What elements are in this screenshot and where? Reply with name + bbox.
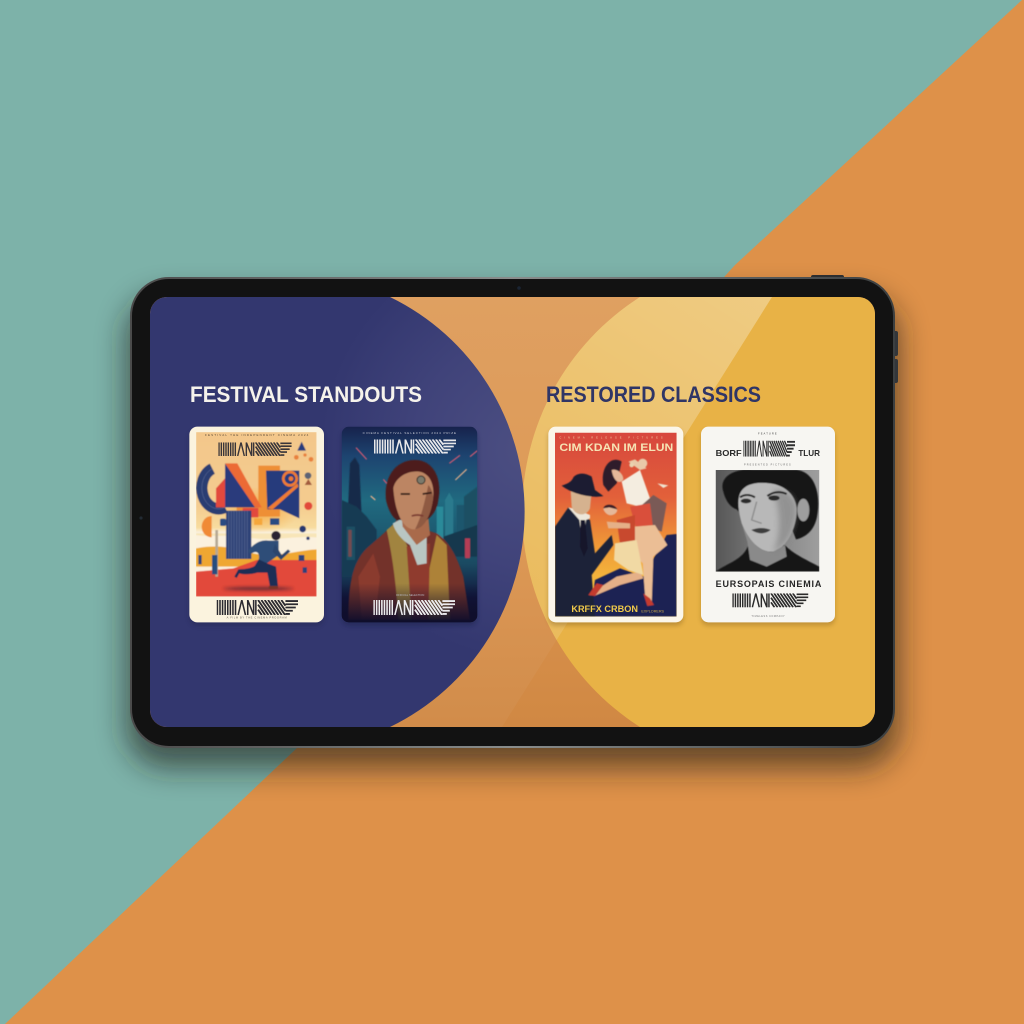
neck [402, 517, 430, 545]
dancing woman [603, 460, 622, 492]
yellow panel highlight [524, 297, 772, 640]
meteors [356, 448, 477, 483]
poster 2 small bottom text: OFFICIAL SELECTION [396, 593, 424, 597]
man in suit [555, 507, 613, 617]
front camera [517, 286, 521, 290]
left navy panel [150, 297, 525, 727]
poster 4 stripes logo top [744, 441, 795, 457]
poster 4 title left: BORF [716, 448, 742, 458]
orange glass highlight [380, 297, 772, 727]
poster 4 small subtitle: PRESENTED PICTURES [744, 463, 791, 466]
poster card 2: woman and skyline [342, 427, 477, 626]
runner figure [234, 531, 290, 589]
poster 4 main caption: EURSOPAIS CINEMIA [716, 579, 822, 589]
heading: festival standouts: FESTIVAL STANDOUTS [190, 382, 422, 407]
poster 2 stripes logo bottom [374, 600, 455, 615]
eyes and mouth [401, 493, 432, 494]
poster card 1: geometric runner [189, 427, 324, 626]
poster 3 title: CIM KDAN IM ELUN [559, 442, 673, 454]
side sensor [139, 516, 143, 520]
small partner figure [603, 505, 617, 515]
poster 2 stripes logo top [375, 439, 456, 454]
face [393, 471, 433, 529]
face shadow [415, 485, 433, 529]
scarf [393, 519, 427, 565]
poster card 3: vintage red poster [548, 427, 683, 626]
navy ground [590, 534, 677, 617]
tablet body [131, 278, 894, 747]
forehead jewel [417, 476, 425, 484]
poster 1 stripes logo top [219, 442, 292, 456]
poster 1 small bottom text: A FILM BY THE CINEMA PROGRAM [227, 616, 287, 620]
heading: restored classics: RESTORED CLASSICS [546, 382, 761, 407]
poster 1 small top text: FESTIVAL THE INDEPENDENT CINEMA 2024 [205, 433, 309, 437]
poster 4 portrait photo [716, 470, 819, 572]
middle orange background [150, 297, 875, 727]
top power button [811, 275, 844, 281]
screen [150, 297, 875, 727]
poster 4 stripes logo bottom [733, 593, 808, 607]
poster 3 small credit: EXPLORERS [641, 609, 665, 613]
right yellow panel [522, 297, 875, 727]
poster 2 small top text: CINEMA FESTIVAL SELECTION 2024 PRIZE [363, 431, 456, 435]
hair [386, 460, 439, 520]
poster 4 small top text: FEATURE [758, 432, 777, 436]
side volume buttons [892, 331, 898, 383]
poster 3 small top text: CINEMA RELEASE PICTURES [559, 435, 663, 439]
jacket [348, 520, 470, 620]
poster card 4: black and white portrait [701, 427, 835, 626]
tablet device [126, 275, 899, 768]
poster 1 stripes logo bottom [217, 600, 298, 615]
poster 4 small bottom text: TIMELESS COMPANY [751, 615, 785, 618]
poster 4 title right: TLUR [798, 448, 820, 458]
skyline [348, 457, 362, 517]
poster 3 credit: KRFFX CRBON [571, 604, 638, 614]
